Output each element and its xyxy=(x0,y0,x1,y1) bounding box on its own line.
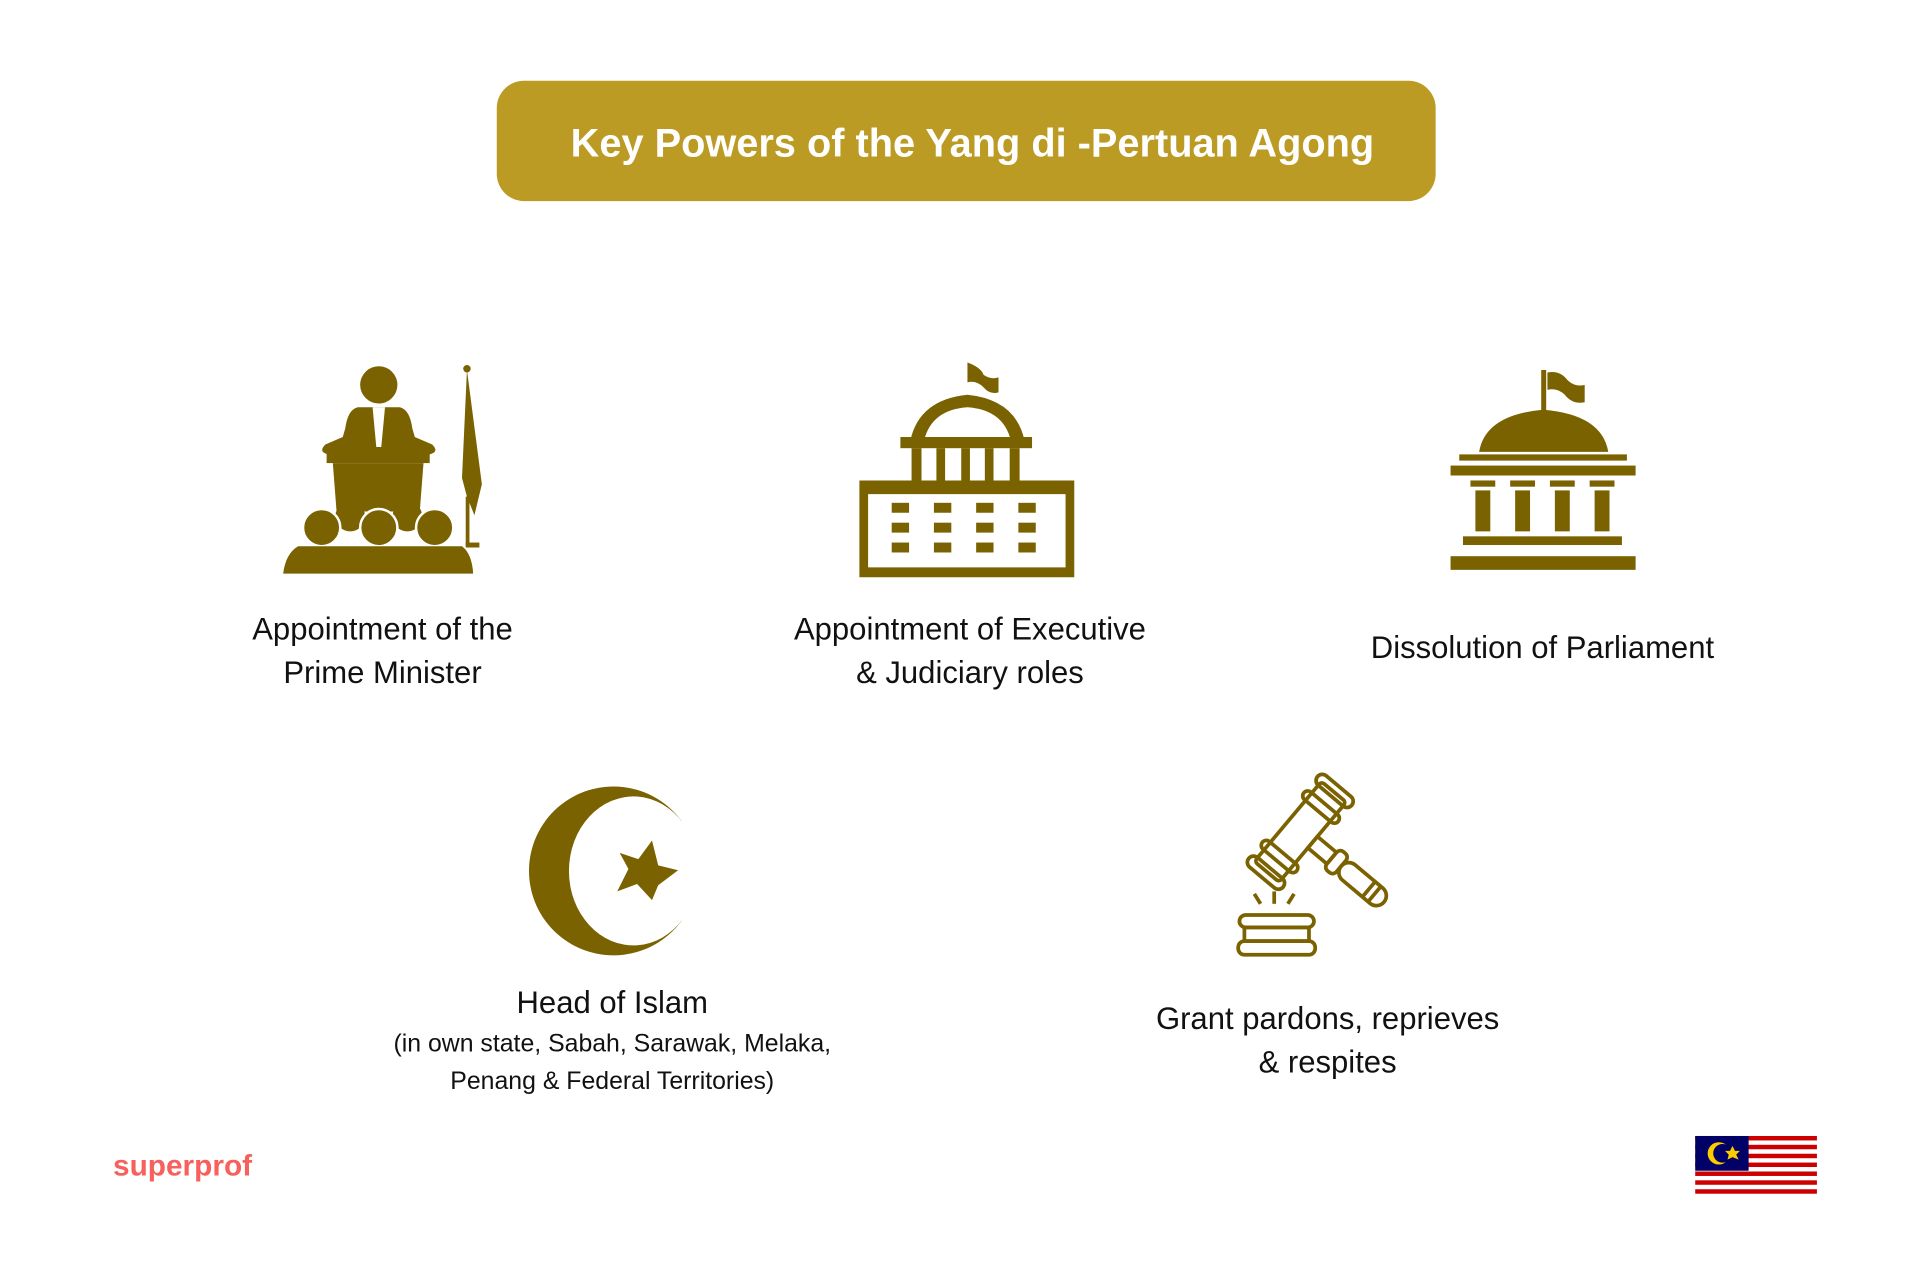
text: grant pardons: Grant pardons, reprieves xyxy=(1156,1001,1499,1036)
text: appointment of PM: Appointment of the xyxy=(252,611,513,646)
logo: superprof: superprof xyxy=(113,1150,252,1183)
title: Key Powers of the Yang di -Pertuan Agong xyxy=(571,121,1374,165)
icon: Malaysia flag xyxy=(1695,1136,1817,1198)
text: head of islam: Penang & Federal Territories) xyxy=(450,1068,774,1095)
icon: crescent and star xyxy=(529,786,683,955)
text: appointment of executive: Appointment of Executive xyxy=(794,611,1146,646)
text: appointment of PM: Prime Minister xyxy=(283,655,482,690)
icon: capitol building xyxy=(859,363,1074,577)
text: head of islam xyxy=(393,985,831,1095)
text: head of islam: (in own state, Sabah, Sarawak, Melaka, xyxy=(393,1031,831,1058)
icon: podium speaker xyxy=(283,365,482,574)
text: head of islam: Head of Islam xyxy=(517,985,708,1020)
text: appointment of executive: & Judiciary roles xyxy=(856,655,1084,690)
text: dissolution: Dissolution of Parliament xyxy=(1371,630,1714,665)
icon: parliament xyxy=(1451,370,1636,570)
title xyxy=(497,81,1436,201)
icon: gavel xyxy=(1238,772,1422,955)
text: grant pardons: & respites xyxy=(1259,1045,1397,1080)
